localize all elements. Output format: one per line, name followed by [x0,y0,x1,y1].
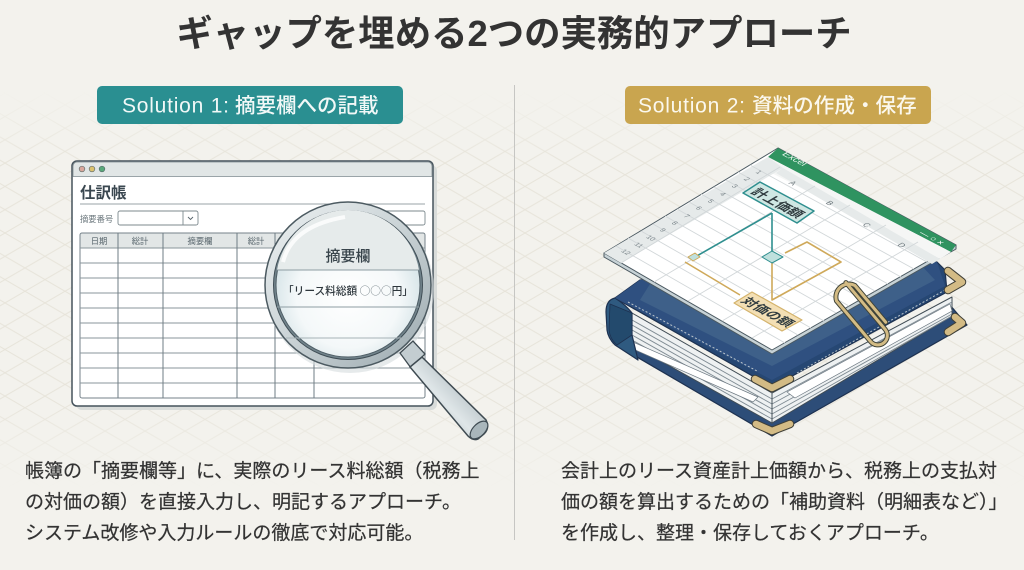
row numbers: 9 [657,228,667,233]
gold connectors [685,242,841,300]
text block: solution 1: システム改修や入力ルールの徹底で対応可能。 [25,522,423,544]
column letters: A [786,180,799,187]
text block: solution 2 [561,460,1008,544]
spreadsheet sheet [604,148,956,354]
title: ギャップを埋める2つの実務的アプローチ [176,13,852,54]
column letters [786,180,908,249]
binder pages [632,297,952,424]
icon: paper clip [831,279,895,349]
column letters: B [823,200,836,207]
sheet header bands [756,157,951,259]
sheet green title bar: Excel [779,150,810,168]
row numbers: 12 [619,249,632,256]
magnifier lens: 摘要欄 [325,248,371,265]
teal connectors [695,213,772,257]
sheet green title bar: — ○ × [917,229,947,246]
sheet green title bar [768,148,956,252]
ledger table: 総計 [132,236,149,246]
badge: solution 1: Solution 1: [122,94,229,118]
icon: binder [606,262,967,436]
journal window [72,161,437,410]
form row [80,211,425,225]
form row: 摘要番号 [80,214,113,224]
panel: solution 1 [25,86,491,544]
window heading: 仕訳帳 [80,183,127,202]
magnifier lens [276,210,420,357]
row numbers: 2 [741,177,751,182]
ledger table: 総計 [248,236,265,246]
connector nodes [762,251,783,263]
text block: solution 2: 価の額を算出するための「補助資料（明細表など）」 [561,491,1008,513]
ledger table: 日期 [91,236,107,246]
magnifier lens: 「リース料総額 ○○○円」 [283,284,413,298]
row numbers: 5 [705,199,715,204]
badge: solution 2 [625,86,931,124]
row numbers: 3 [729,184,739,189]
magnifier handle [400,341,491,442]
binder top cover [615,262,947,387]
row numbers: 4 [717,192,727,197]
text block: solution 1: 帳簿の「摘要欄等」に、実際のリース料総額（税務上 [25,460,479,482]
binder gold corners [755,271,962,431]
sheet grid [616,165,927,343]
row numbers: 7 [681,214,691,219]
badge: solution 1: 摘要欄への記載 [235,94,378,118]
ledger table: 摘要欄 [188,236,212,246]
magnifier ring [265,202,431,368]
row numbers: 11 [632,242,644,249]
column letters: D [895,242,908,249]
row numbers: 1 [753,170,763,175]
text block: solution 2: を作成し、整理・保存しておくアプローチ。 [561,522,939,544]
window title bar [73,162,432,176]
magnifier shadow [266,205,434,373]
ledger table [80,233,425,398]
center divider [514,85,516,540]
badge: solution 2: 資料の作成・保存 [752,94,917,118]
panel: solution 2 [561,86,1008,544]
text block: solution 1 [25,460,479,544]
label: consideration: 対価の額 [737,295,799,329]
badge: solution 2: Solution 2: [638,94,745,118]
text block: solution 2: 会計上のリース資産計上価額から、税務上の支払対 [561,460,997,482]
row numbers: 8 [669,221,679,226]
label: recorded value [743,182,814,223]
icon: magnifying glass [265,202,491,442]
text block: solution 1: の対価の額）を直接入力し、明記するアプローチ。 [25,491,461,513]
binder bottom cover [613,305,967,436]
column letters: C [860,222,873,229]
row numbers [619,170,763,256]
label: recorded value: 計上価額 [747,186,809,220]
badge: solution 1 [97,86,403,124]
row numbers: 10 [644,235,657,242]
row numbers: 6 [693,206,703,211]
binder spine [606,298,638,360]
